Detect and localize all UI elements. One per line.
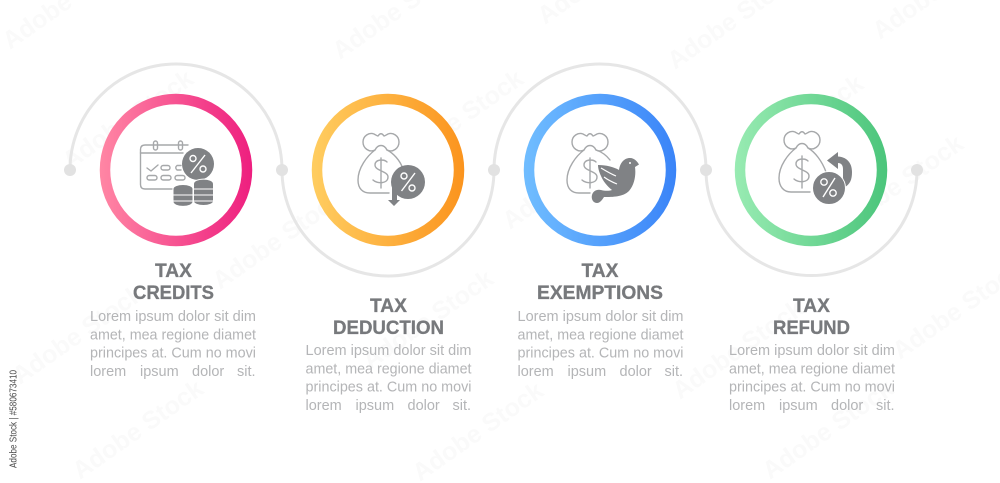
text block	[90, 309, 256, 380]
panel: tax refund	[729, 99, 895, 414]
text: Adobe Stock	[667, 294, 809, 405]
heading	[773, 295, 850, 339]
text: Adobe Stock	[357, 264, 499, 375]
text block: principes at. Cum no movi	[90, 346, 256, 362]
text block: ipsum	[779, 398, 818, 414]
text block: Lorem ipsum dolor sit dim	[90, 309, 256, 325]
heading: TAX	[582, 260, 618, 282]
text block: Lorem ipsum dolor sit dim	[729, 343, 895, 359]
text: Adobe Stock	[497, 124, 639, 235]
heading: REFUND	[773, 317, 850, 339]
text block: ipsum	[568, 364, 606, 380]
text block: amet, mea regione diamet	[518, 327, 684, 343]
icon: money bag with percent down	[358, 133, 425, 206]
heading: TAX	[155, 260, 192, 282]
panel: tax credits	[90, 99, 256, 380]
green ring	[740, 99, 882, 241]
orange ring	[317, 99, 459, 241]
text: Adobe Stock	[727, 69, 869, 180]
text block: ipsum	[140, 364, 179, 380]
text block: sit.	[664, 364, 683, 380]
text: Adobe Stock	[57, 64, 199, 175]
text block: sit.	[452, 398, 471, 414]
text block: principes at. Cum no movi	[729, 380, 895, 396]
text block: lorem	[518, 364, 554, 380]
heading: EXEMPTIONS	[537, 282, 663, 304]
stock id side text: Adobe Stock | #580673410	[8, 370, 20, 468]
heading	[333, 295, 444, 339]
text block: Lorem ipsum dolor sit dim	[306, 343, 472, 359]
text block: sit.	[237, 364, 256, 380]
text block: amet, mea regione diamet	[729, 361, 895, 377]
text block: lorem	[729, 398, 765, 414]
icon: calendar with percent and coins	[140, 141, 214, 206]
text block	[306, 343, 472, 414]
connecting timeline path	[64, 64, 923, 276]
pink ring	[105, 99, 247, 241]
text: Adobe Stock	[207, 184, 349, 295]
text block: dolor	[831, 398, 863, 414]
text: Adobe Stock	[67, 374, 209, 483]
heading: DEDUCTION	[333, 317, 444, 339]
heading: TAX	[793, 295, 830, 317]
text block: ipsum	[356, 398, 394, 414]
heading	[537, 260, 663, 304]
text block: lorem	[90, 364, 126, 380]
icon: money bag with percent and return arrow	[779, 131, 852, 204]
blue ring	[529, 99, 671, 241]
heading: CREDITS	[133, 282, 214, 304]
text block	[729, 343, 895, 414]
text block: amet, mea regione diamet	[90, 327, 256, 343]
panel: tax exemptions	[518, 99, 684, 380]
text: Adobe Stock	[387, 64, 529, 175]
text block: Lorem ipsum dolor sit dim	[518, 309, 684, 325]
text block: lorem	[306, 398, 342, 414]
text block: principes at. Cum no movi	[306, 380, 472, 396]
panel: tax deduction	[306, 99, 472, 414]
text block: sit.	[876, 398, 895, 414]
text block: dolor	[408, 398, 440, 414]
text: Adobe Stock	[827, 129, 969, 240]
text block: amet, mea regione diamet	[306, 361, 472, 377]
text block: principes at. Cum no movi	[518, 346, 684, 362]
text block: dolor	[192, 364, 224, 380]
heading: TAX	[370, 295, 407, 317]
text: Adobe Stock	[757, 374, 899, 483]
heading	[133, 260, 214, 304]
text: Adobe Stock	[7, 279, 149, 390]
text block: dolor	[620, 364, 652, 380]
icon: money bag with dove	[567, 133, 639, 203]
text block	[518, 309, 684, 380]
